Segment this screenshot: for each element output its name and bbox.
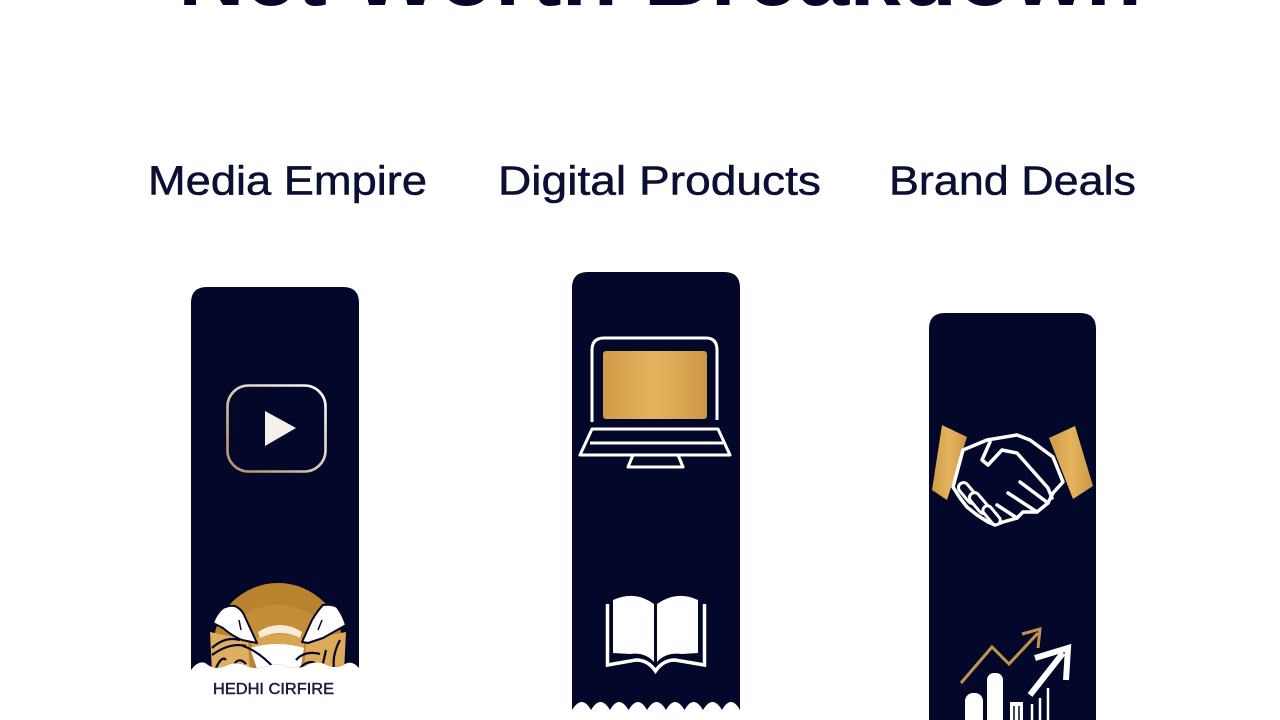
heading: Digital Products: Digital Products [498, 158, 821, 204]
heading: Media Empire: Media Empire [148, 158, 427, 204]
icon: growth chart [961, 629, 1068, 720]
icon: open book [608, 596, 704, 671]
panel: media empire [191, 287, 359, 670]
icon: gold dome emblem [210, 583, 346, 668]
panel: brand deals [929, 313, 1096, 720]
icon: handshake [932, 425, 1093, 527]
heading: Brand Deals: Brand Deals [889, 158, 1136, 204]
caption: media emblem text: HEDHI CIRFIRE [213, 681, 334, 698]
panel: digital products [572, 272, 740, 710]
icon: play button [228, 386, 326, 472]
icon: laptop [580, 338, 730, 467]
